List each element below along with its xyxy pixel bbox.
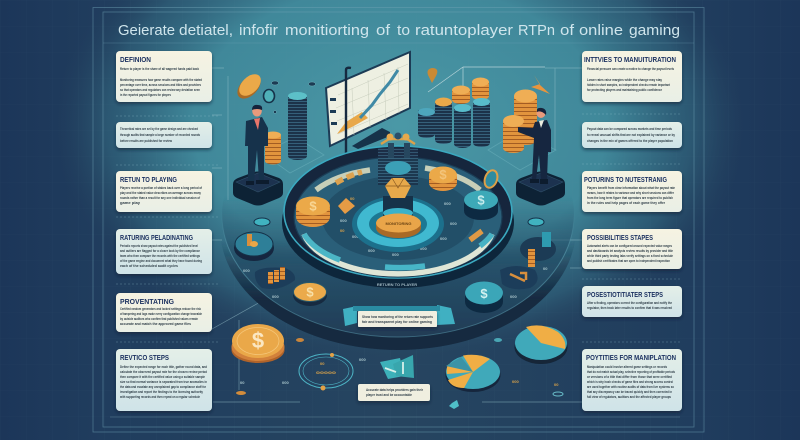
- gauge ticks: 000: [444, 201, 451, 206]
- ring token: [482, 168, 500, 190]
- icon: lens: [264, 90, 274, 102]
- panel: revised steps: Define the expected range for each title, gather round data, and: [120, 365, 207, 369]
- banner: centre: [343, 305, 455, 327]
- diamond marker: [338, 198, 355, 214]
- coin: big gold: $: [252, 328, 264, 353]
- coin: big gold: [232, 324, 284, 363]
- panel: preventing: by outside auditors who confirm that published values remain: [120, 317, 198, 321]
- panel: revised steps: with supporting records and then repeat on a regular schedule: [119, 395, 200, 399]
- platform: [220, 93, 576, 350]
- coin: tilted gold: [233, 70, 265, 103]
- banner: centre: Show how monitoring of the return rate supports: [362, 315, 433, 319]
- panel: return to playing: RETUN TO PLAYING: [120, 175, 177, 184]
- panel: preventing: accurate and match the approved game files: [120, 322, 191, 326]
- banner: centre: fair and transparent play for online gaming: [362, 320, 432, 324]
- small labels: 00: [543, 266, 548, 271]
- panel: return to playing: play and the stated value describes an average across many: [120, 191, 201, 195]
- gold stacks right figure: [503, 90, 537, 153]
- token: right dish: [520, 232, 556, 267]
- gauge ticks: [340, 196, 457, 257]
- gauge ticks: 000: [440, 236, 447, 241]
- dark coin stack: [288, 92, 307, 160]
- coin: teal: $: [477, 192, 485, 208]
- panel: incentives to manipulation: INTTVIES TO MANUITURATION: [584, 55, 676, 64]
- label: disc caption: RETURN TO PLAYER: [377, 282, 417, 287]
- panel: definition: so that operators and regulators can review any deviation seen: [120, 88, 200, 92]
- pie chart: lower: [446, 355, 500, 392]
- pie chart: upper: [514, 325, 568, 364]
- gauge ticks: 000: [352, 234, 359, 239]
- title: infofir: [239, 22, 278, 39]
- panel: summary right: [582, 122, 682, 148]
- title: to: [397, 22, 410, 39]
- gold base: [376, 214, 421, 238]
- title: ratuntoplayer: [415, 22, 513, 39]
- token: left crescent: [255, 267, 295, 289]
- gauge band: [304, 168, 492, 274]
- gold base: MONITORING: [386, 221, 411, 226]
- pole pointer: [342, 68, 351, 180]
- frame: [93, 8, 704, 432]
- panel: potentials to understanding: from the long term figure that operators are required to publish: [587, 196, 673, 200]
- panel: possibilities steps: and publish certificates that are open to independent inspection: [587, 259, 670, 263]
- coin: gold left: $: [309, 198, 317, 214]
- panel: return to playing: rounds rather than a result for any one individual session of: [120, 196, 201, 200]
- panel: incentives to manipulation: [582, 51, 682, 102]
- title: of: [560, 22, 575, 39]
- panel: definition: Return to player is the share of all wagered funds paid back: [120, 67, 199, 71]
- panel: incentives to manipulation: hidden in short samples, so independent checks remain important: [587, 83, 671, 87]
- panel: summary left: Theoretical rates are set by the game design and are checked: [120, 127, 198, 131]
- pedestal left: [233, 172, 283, 206]
- panel: summary left: [116, 122, 212, 148]
- panel: revised steps: then compare it with the certified value using a suitable sample: [120, 375, 205, 379]
- panel: revised steps: calculate the observed payout rate for the chosen review period: [120, 370, 207, 374]
- panel: possibilities steps: Automated alerts can be configured around expected value ranges: [587, 244, 672, 248]
- coin stacks right: [418, 78, 490, 148]
- panel: potentials for manipulation: that any discrepancy can be traced quickly and then corrected in: [587, 390, 672, 394]
- coin: gold lower platform: [293, 282, 327, 306]
- small labels: [236, 266, 563, 409]
- gauge ticks: 000: [450, 221, 457, 226]
- panel: possibilities steps: POSSIBILITIES STAPES: [587, 233, 653, 242]
- panel: returning reliability: each of the scheduled audit cycles: [120, 264, 178, 268]
- coin: gold lower platform: $: [306, 284, 314, 300]
- panel: potentials for manipulation: Manipulation could involve altered game settings or records: [587, 365, 667, 369]
- panel: summary right: to reveal unusual shifts that are not explained by variance or by: [587, 133, 675, 137]
- panel: definition: Monitoring measures how game results compare with the stated: [120, 78, 202, 82]
- small labels: 000: [272, 294, 279, 299]
- arrow: orange: [531, 75, 550, 94]
- small labels: 000: [512, 379, 519, 384]
- panel: potentials to understanding: in the rules and help pages of each game they offer: [587, 201, 666, 205]
- title: online: [579, 22, 623, 39]
- token: right crescent: [500, 266, 538, 289]
- heading: definition: DEFINION: [120, 55, 151, 64]
- panel: revised steps: the data and escalate any unexplained gap to compliance staff for: [120, 385, 206, 389]
- title: monitiorting: [285, 22, 369, 39]
- icon: teal tiles: [380, 355, 414, 379]
- gauge ticks: 00: [350, 196, 355, 201]
- panel: revised steps: REVTICO STEPS: [120, 353, 169, 362]
- panel: return to playing: [116, 171, 212, 212]
- gauge ticks: 000: [420, 246, 427, 251]
- central tower: [378, 132, 418, 228]
- gauge ticks: 00: [340, 228, 345, 233]
- panel: postinitiated steps: [582, 286, 682, 317]
- panel: incentives to manipulation: for protecting players and maintaining public confidence: [587, 88, 662, 92]
- coin: gold left: [296, 196, 330, 227]
- circular gauge: 00: [320, 361, 325, 366]
- panel: incentives to manipulation: Financial pressure can create a motive to change the payout levels: [587, 67, 674, 71]
- title: gaming: [629, 22, 680, 39]
- circular gauge: [299, 353, 353, 390]
- panel: summary right: changes in the mix of games offered to the player population: [587, 139, 673, 143]
- panel: potentials to understanding: means, how it relates to variance and why short sessions can differ: [587, 191, 674, 195]
- circular gauge: 00000: [316, 370, 337, 375]
- panel: return to playing: game play: [120, 201, 140, 205]
- coin: gold upper right: $: [439, 167, 447, 182]
- panel: preventing: of tampering and logs make every configuration change traceable: [120, 312, 202, 316]
- small floating marks: [272, 81, 316, 114]
- token: small teal top: [254, 218, 544, 226]
- ground plates: [262, 132, 556, 173]
- small labels: 00: [554, 382, 559, 387]
- coin: gold upper right: [429, 166, 457, 191]
- gold stack left: [265, 132, 281, 165]
- small labels: 00: [240, 380, 245, 385]
- monitor: [326, 52, 410, 149]
- note: bottom: player trust and be accountable: [366, 393, 412, 397]
- panel: revised steps: [116, 349, 212, 411]
- token: left stack dish: [234, 232, 274, 261]
- title: RTPn: [518, 22, 555, 39]
- panel: potentials to understanding: [582, 171, 682, 212]
- panel: potentials for manipulation: are used together with routine audits of data from live systems so: [587, 385, 675, 389]
- small labels: 000: [282, 380, 289, 385]
- panel: potentials for manipulation: that do not match actual play, selective reporting of profitable periods: [587, 370, 675, 374]
- panel: potentials for manipulation: [582, 349, 682, 411]
- panel: definition: [116, 51, 212, 102]
- title: of: [376, 22, 391, 39]
- coin: teal lower platform: [465, 282, 503, 313]
- figure left: [245, 105, 269, 185]
- panel: revised steps: size so that normal variance is separated from true anomalies in: [120, 380, 207, 384]
- central disc: [282, 146, 514, 288]
- panel: postinitiated steps: After a finding, operators correct the configuration and notify the: [587, 301, 672, 305]
- panel: return to playing: Players receive a portion of stakes back over a long period of: [120, 186, 203, 190]
- gauge ticks: 000: [340, 218, 347, 223]
- panel: potentials for manipulation: which is why hash checks of game files and strong access control: [586, 380, 673, 384]
- small labels: 000: [243, 268, 250, 273]
- title: detiatel,: [179, 22, 233, 39]
- small labels: 000: [359, 357, 366, 362]
- figure right: [518, 108, 551, 184]
- panel: possibilities steps: while third party testing labs verify settings on a fixed schedule: [586, 254, 673, 258]
- panel: potentials to understanding: POTURINS TO NUTESTRANIG: [584, 175, 667, 184]
- panel: summary left: before results are published for review: [120, 139, 172, 143]
- small labels: 000: [510, 294, 517, 299]
- panel: returning reliability: team who then compare the records with the certified settings: [120, 254, 200, 258]
- note: bottom: Accurate data helps providers gain their: [366, 388, 423, 392]
- icon: pin: [428, 68, 437, 83]
- panel: revised steps: investigation and report the findings to the licensing authority: [120, 390, 203, 394]
- gauge ticks: 000: [368, 248, 375, 253]
- panel: potentials for manipulation: or versions of a title that differ from those that were certified: [587, 375, 672, 379]
- panel: returning reliability: of the game engine and document what they have found during: [120, 259, 202, 263]
- panel: postinitiated steps: regulator, then track later results to confirm that it was resolved: [587, 306, 672, 310]
- note: bottom: [358, 384, 430, 401]
- panel: preventing: [116, 293, 212, 332]
- panel: definition: in the reported payout figures for players: [120, 93, 171, 97]
- panel: potentials to understanding: Players benefit from clear information about what the payout rate: [587, 186, 675, 190]
- gauge ticks: 000: [392, 252, 399, 257]
- panel: returning reliability: [116, 229, 212, 274]
- panel: returning reliability: RATURING PELADINATING: [120, 233, 193, 242]
- panel: postinitiated steps: POSESTIOTITIATER STEPS: [587, 290, 663, 299]
- panel: definition: percentage over time, across sessions and titles and providers: [120, 83, 201, 87]
- pedestal right: [516, 172, 565, 206]
- panel: summary left: through audits that sample a large number of recorded rounds: [120, 133, 200, 137]
- panel: summary right: Payout data can be compared across markets and time periods: [587, 127, 672, 131]
- panel: incentives to manipulation: Lower rates raise margins while the change may stay: [587, 78, 662, 82]
- panel: returning reliability: Periodic reports show payout rates against the published level: [120, 244, 198, 248]
- panel: returning reliability: and outliers are flagged for a closer look by the compliance: [120, 249, 200, 253]
- panel: potentials for manipulation: POYTITIES FOR MANIPLATION: [586, 353, 676, 362]
- panel: possibilities steps: and dashboards let analysts review results by provider and title: [587, 249, 673, 253]
- connector lines: [110, 67, 682, 417]
- panel: possibilities steps: [582, 229, 682, 269]
- panel: potentials for manipulation: full view of regulators, auditors and the affected player groups: [587, 395, 671, 399]
- title: Geierate: [118, 22, 175, 39]
- coin: teal lower platform: $: [480, 286, 488, 301]
- panel: preventing: PROVENTATING: [120, 297, 174, 306]
- panel: preventing: Certified random generators and locked settings reduce the risk: [120, 307, 201, 311]
- coin: teal: [464, 190, 498, 220]
